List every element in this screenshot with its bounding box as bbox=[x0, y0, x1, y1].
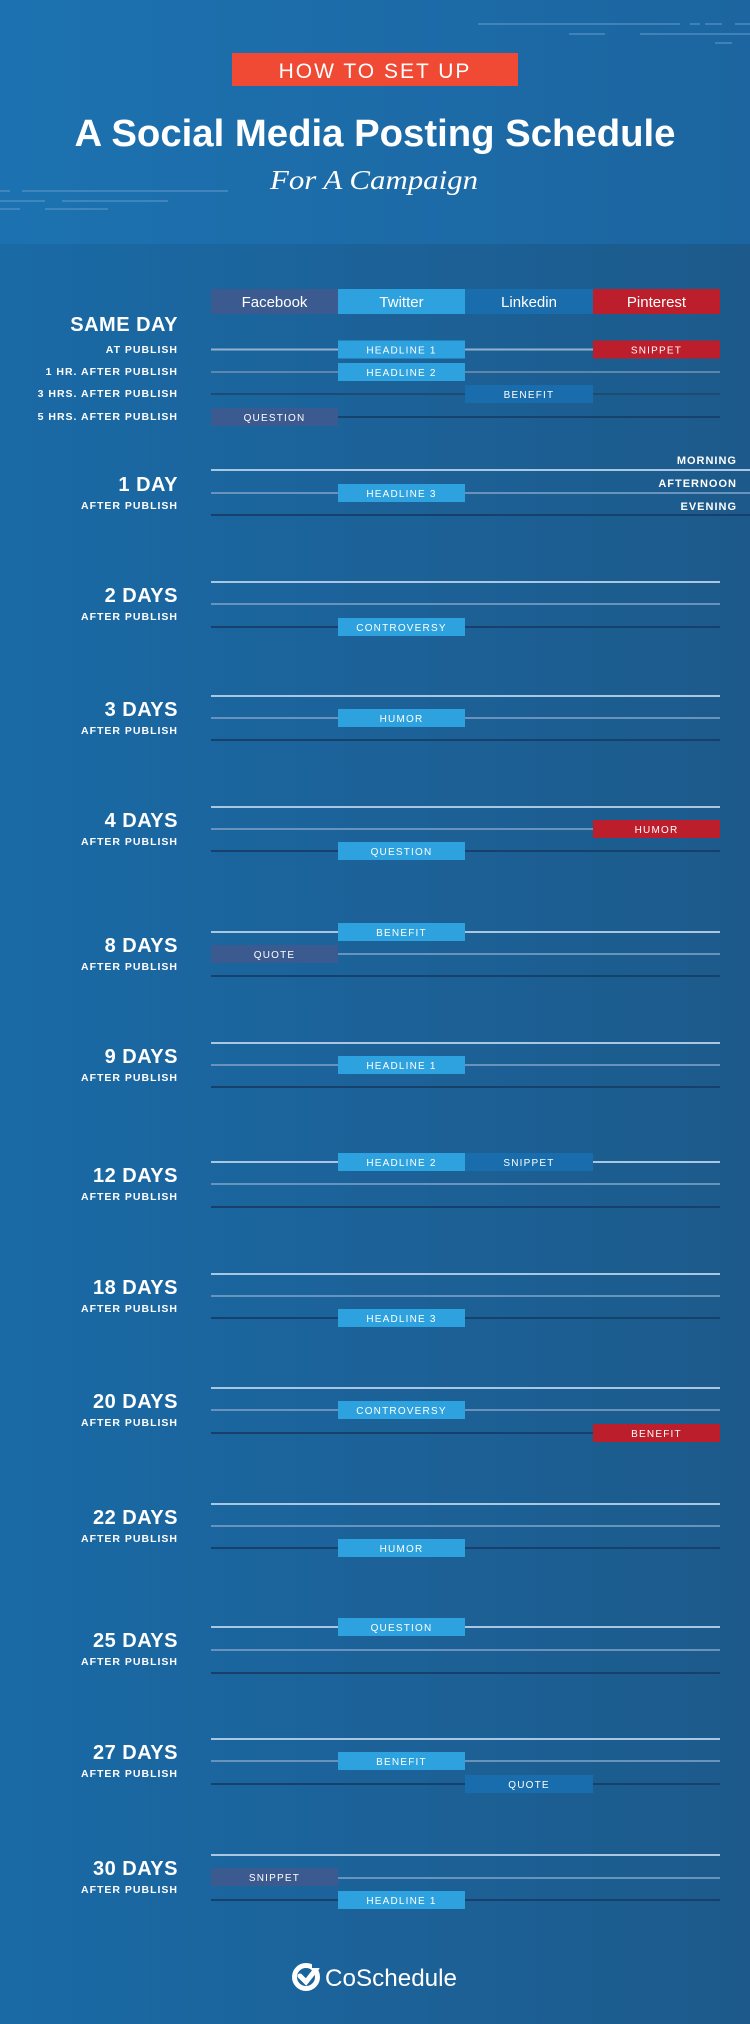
banner: how to set up bbox=[232, 53, 518, 86]
row: same day: HEADLINE 2 bbox=[366, 368, 437, 379]
row: 20 days: 20 DAYS bbox=[93, 1391, 178, 1413]
row: 25 days: AFTER PUBLISH bbox=[81, 1656, 178, 1668]
row: 8 days: AFTER PUBLISH bbox=[81, 961, 178, 973]
row: 1 day: EVENING bbox=[680, 501, 737, 513]
logo: CoSchedule: CoSchedule bbox=[325, 1965, 457, 1992]
row: 3 days: HUMOR bbox=[380, 714, 423, 725]
row: 1 day bbox=[81, 455, 750, 515]
row: 4 days: 4 DAYS bbox=[105, 810, 178, 832]
row: 1 day: HEADLINE 3 bbox=[366, 489, 437, 500]
row: 1 day: AFTERNOON bbox=[658, 478, 737, 490]
row: 1 day: AFTER PUBLISH bbox=[81, 500, 178, 512]
row: same day: QUESTION bbox=[244, 413, 305, 424]
row: 20 days: BENEFIT bbox=[631, 1429, 682, 1440]
title: A Social Media Posting Schedule bbox=[74, 113, 676, 155]
row: 25 days: 25 DAYS bbox=[93, 1630, 178, 1652]
column headers bbox=[211, 289, 720, 314]
column headers: Linkedin bbox=[501, 294, 557, 311]
column headers: Facebook bbox=[242, 294, 308, 311]
row: 4 days bbox=[81, 807, 720, 860]
row: 4 days: AFTER PUBLISH bbox=[81, 836, 178, 848]
row: same day: 3 HRS. AFTER PUBLISH bbox=[38, 388, 178, 400]
row: 30 days: HEADLINE 1 bbox=[366, 1896, 437, 1907]
row: same day: SAME DAY bbox=[70, 314, 178, 336]
row: 18 days: 18 DAYS bbox=[93, 1277, 178, 1299]
row: 2 days: CONTROVERSY bbox=[356, 623, 447, 634]
row: 30 days bbox=[81, 1855, 720, 1909]
row: 9 days bbox=[81, 1043, 720, 1087]
row: 27 days: 27 DAYS bbox=[93, 1742, 178, 1764]
row: 12 days: HEADLINE 2 bbox=[366, 1158, 437, 1169]
row: 12 days bbox=[81, 1153, 720, 1207]
row: 12 days: AFTER PUBLISH bbox=[81, 1191, 178, 1203]
row: same day: HEADLINE 1 bbox=[366, 346, 437, 356]
banner: how to set up: HOW TO SET UP bbox=[279, 60, 471, 83]
row: 4 days: QUESTION bbox=[371, 847, 432, 858]
row: 27 days: BENEFIT bbox=[376, 1757, 427, 1768]
row: 30 days: SNIPPET bbox=[249, 1873, 300, 1884]
row: 22 days bbox=[81, 1504, 720, 1557]
row: 20 days bbox=[81, 1388, 720, 1442]
row: 2 days bbox=[81, 582, 720, 636]
row: 8 days: QUOTE bbox=[254, 950, 295, 961]
row: 22 days: 22 DAYS bbox=[93, 1507, 178, 1529]
row: 1 day: MORNING bbox=[677, 455, 737, 467]
row: 20 days: AFTER PUBLISH bbox=[81, 1417, 178, 1429]
subtitle: For A Campaign bbox=[269, 165, 478, 195]
row: 30 days: 30 DAYS bbox=[93, 1858, 178, 1880]
row: same day: AT PUBLISH bbox=[106, 344, 178, 356]
row: 3 days: AFTER PUBLISH bbox=[81, 725, 178, 737]
header background bbox=[0, 0, 750, 244]
column headers: Twitter bbox=[379, 294, 424, 311]
row: 22 days: HUMOR bbox=[380, 1544, 423, 1555]
row: 2 days: 2 DAYS bbox=[105, 585, 178, 607]
row: 2 days: AFTER PUBLISH bbox=[81, 611, 178, 623]
row: same day: BENEFIT bbox=[504, 390, 554, 401]
row: 30 days: AFTER PUBLISH bbox=[81, 1884, 178, 1896]
row: 8 days bbox=[81, 923, 720, 976]
row: 18 days bbox=[81, 1274, 720, 1327]
row: 12 days: 12 DAYS bbox=[93, 1165, 178, 1187]
column headers: Pinterest bbox=[627, 294, 687, 311]
row: 25 days: QUESTION bbox=[371, 1623, 432, 1634]
row: 25 days bbox=[81, 1618, 720, 1673]
row: 18 days: AFTER PUBLISH bbox=[81, 1303, 178, 1315]
row: same day: SNIPPET bbox=[631, 346, 682, 356]
row: 8 days: 8 DAYS bbox=[105, 935, 178, 957]
row: 12 days: SNIPPET bbox=[503, 1158, 555, 1169]
row: 9 days: 9 DAYS bbox=[105, 1046, 178, 1068]
row: 3 days: 3 DAYS bbox=[105, 699, 178, 721]
row: 1 day: 1 DAY bbox=[118, 474, 178, 496]
row: 27 days: AFTER PUBLISH bbox=[81, 1768, 178, 1780]
row: 4 days: HUMOR bbox=[635, 825, 678, 836]
row: 8 days: BENEFIT bbox=[376, 928, 427, 939]
row: 27 days bbox=[81, 1739, 720, 1793]
row: 22 days: AFTER PUBLISH bbox=[81, 1533, 178, 1545]
row: 27 days: QUOTE bbox=[508, 1780, 550, 1791]
row: 3 days bbox=[81, 696, 720, 740]
row: 20 days: CONTROVERSY bbox=[356, 1406, 447, 1417]
row: same day bbox=[38, 314, 720, 426]
row: 18 days: HEADLINE 3 bbox=[366, 1314, 437, 1325]
row: 9 days: HEADLINE 1 bbox=[366, 1061, 437, 1072]
row: same day: 1 HR. AFTER PUBLISH bbox=[46, 366, 178, 378]
row: same day: 5 HRS. AFTER PUBLISH bbox=[38, 411, 178, 423]
row: 9 days: AFTER PUBLISH bbox=[81, 1072, 178, 1084]
